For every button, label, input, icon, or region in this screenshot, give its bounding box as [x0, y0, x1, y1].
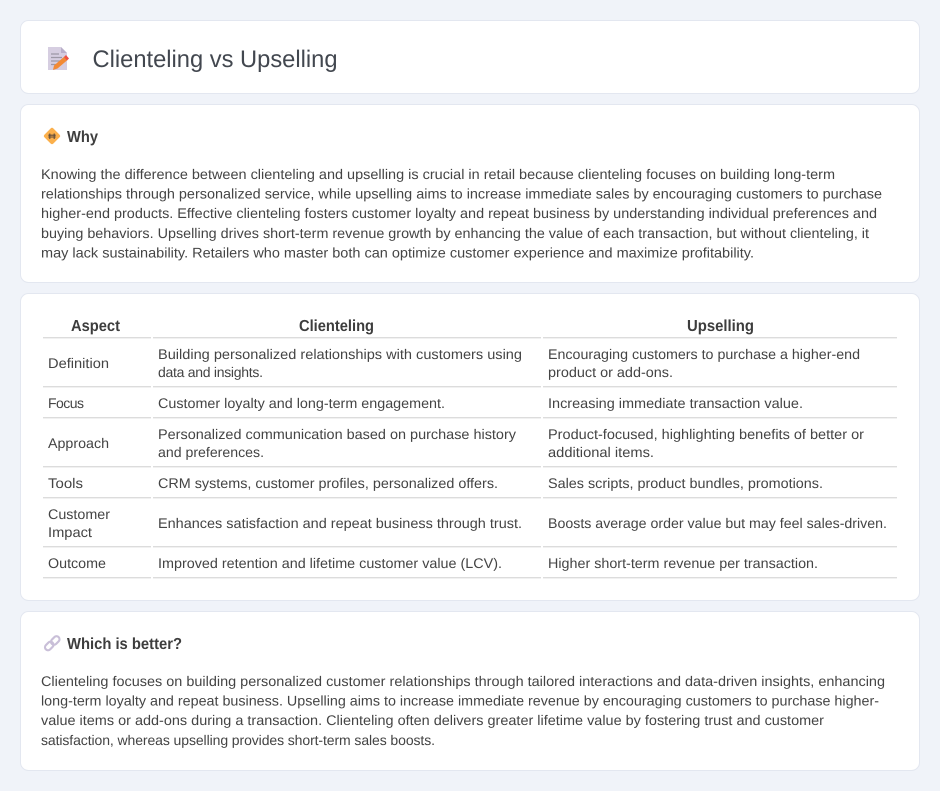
row: definition: product or add-ons. — [548, 364, 673, 380]
row: tools — [48, 475, 823, 491]
heading: why: Why — [67, 129, 98, 146]
table header row: Upselling — [687, 318, 754, 335]
table header row — [71, 318, 754, 335]
row: outcome — [48, 555, 818, 571]
row: approach: and preferences. — [158, 444, 264, 460]
text block: which is better paragraph: long-term loyalty and repeat business. Upselling aims to increase immediate revenue by encouraging customers to purchase higher- — [41, 693, 879, 709]
panel: which is better — [20, 612, 920, 770]
heading: which is better: Which is better? — [67, 636, 182, 653]
text block: why paragraph: Knowing the difference between clienteling and upselling is crucial in retail because clienteling focuses on building long-term — [41, 166, 835, 182]
row: outcome: Outcome — [48, 555, 106, 571]
icon: orange diamond sign — [43, 127, 61, 145]
row: customer impact: Customer — [48, 506, 110, 522]
row: focus — [48, 395, 803, 411]
panel: why — [20, 104, 920, 282]
text block: which is better paragraph — [41, 673, 885, 748]
row: outcome: Higher short-term revenue per transaction. — [548, 555, 818, 571]
table header row: Clienteling — [299, 318, 374, 335]
row: approach: additional items. — [548, 444, 654, 460]
text block: why paragraph: higher-end products. Effective clienteling fosters customer loyalty and repeat business by understanding individual preferences and — [41, 205, 877, 221]
row: customer impact — [48, 506, 887, 540]
icon: chain link — [44, 635, 61, 651]
icon: document with pencil — [48, 47, 69, 70]
row: focus: Customer loyalty and long-term engagement. — [158, 395, 445, 411]
text block: which is better paragraph: Clienteling focuses on building personalized customer relationships through tailored interactions and data-driven insights, enhancing — [41, 673, 885, 689]
row: focus: Increasing immediate transaction value. — [548, 395, 803, 411]
row: approach: Product-focused, highlighting benefits of better or — [548, 426, 864, 442]
text block: which is better paragraph: value items or add-ons during a transaction. Clienteling often delivers greater lifetime value by fostering trust and customer — [41, 712, 824, 728]
row: tools: Sales scripts, product bundles, promotions. — [548, 475, 823, 491]
text block: which is better paragraph: satisfaction, whereas upselling provides short-term sales boosts. — [41, 732, 435, 748]
row: customer impact: Impact — [48, 524, 92, 540]
text block: why paragraph: buying behaviors. Upselling drives short-term revenue growth by enhancing the value of each transaction, but without clienteling, it — [41, 225, 869, 241]
row: definition — [48, 346, 860, 380]
row: approach — [48, 426, 864, 460]
row: definition: Definition — [48, 355, 109, 371]
row: customer impact: Boosts average order value but may feel sales-driven. — [548, 515, 887, 531]
row: definition: data and insights. — [158, 364, 263, 380]
title: Clienteling vs Upselling — [92, 46, 338, 73]
row: definition: Encouraging customers to purchase a higher-end — [548, 346, 860, 362]
table header row: Aspect — [71, 318, 121, 335]
row: outcome: Improved retention and lifetime customer value (LCV). — [158, 555, 502, 571]
row: tools: Tools — [48, 475, 83, 491]
row: approach: Personalized communication based on purchase history — [158, 426, 516, 442]
row: approach: Approach — [48, 435, 109, 451]
text block: why paragraph — [41, 166, 882, 260]
row: tools: CRM systems, customer profiles, personalized offers. — [158, 475, 498, 491]
text block: why paragraph: may lack sustainability. Retailers who master both can optimize customer experience and maximize profitability. — [41, 244, 754, 260]
row: customer impact: Enhances satisfaction and repeat business through trust. — [158, 515, 522, 531]
text block: why paragraph: relationships through personalized service, while upselling aims to increase immediate sales by encouraging customers to purchase — [41, 186, 882, 202]
row: focus: Focus — [48, 395, 84, 411]
row: definition: Building personalized relationships with customers using — [158, 346, 522, 362]
panel: comparison table — [20, 294, 920, 600]
panel: title header — [20, 20, 920, 94]
